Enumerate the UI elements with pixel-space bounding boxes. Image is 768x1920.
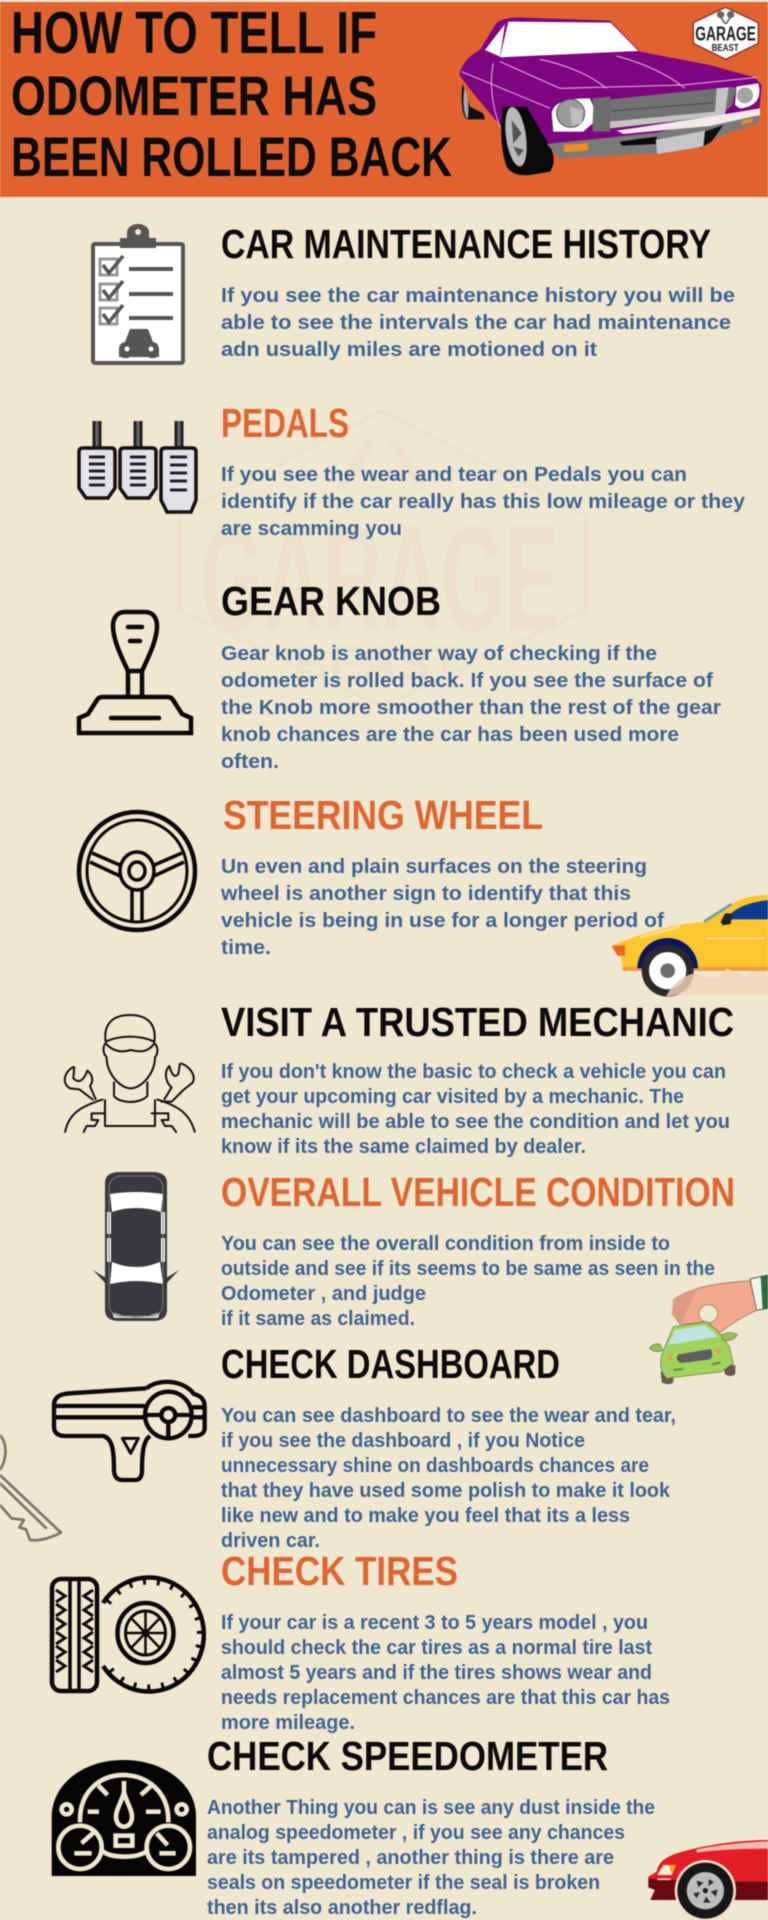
title: HOW TO TELL IF [11, 0, 377, 66]
text block: You can see the overall condition from inside to [221, 1233, 670, 1255]
text block [221, 1612, 670, 1734]
icon: hand holding green car [649, 1275, 768, 1384]
heading: CHECK DASHBOARD [221, 1341, 560, 1387]
text block: outside and see if its seems to be same as seen in the [221, 1258, 715, 1280]
text block: then its also another redflag. [207, 1897, 477, 1919]
text block: able to see the intervals the car had maintenance [221, 312, 731, 334]
icon: mechanic [65, 1015, 195, 1133]
text block: If you see the car maintenance history you will be [221, 285, 735, 307]
icon: car key [0, 1435, 61, 1540]
text block [221, 1233, 715, 1330]
text block: get your upcoming car visited by a mechanic. The [221, 1086, 684, 1108]
title: ODOMETER HAS [11, 64, 377, 127]
text block [221, 643, 721, 773]
text block: more mileage. [221, 1712, 355, 1734]
panel: car maintenance history [93, 221, 735, 363]
text block: Un even and plain surfaces on the steering [221, 856, 647, 878]
text block: mechanic will be able to see the condition and let you [221, 1111, 730, 1133]
text block: vehicle is being in use for a longer period of [221, 910, 664, 932]
text block: like new and to make you feel that its a less [221, 1505, 630, 1527]
text block: if you see the dashboard , if you Notice [221, 1430, 585, 1452]
text block: almost 5 years and if the tires shows wear and [221, 1662, 652, 1684]
text block: that they have used some polish to make it look [221, 1480, 671, 1502]
text block: driven car. [221, 1530, 320, 1552]
text block [221, 1405, 676, 1552]
text block [207, 1797, 655, 1919]
text block: know if its the same claimed by dealer. [221, 1136, 586, 1158]
panel: visit a trusted mechanic [65, 999, 734, 1158]
heading: GEAR KNOB [221, 578, 441, 624]
title: BEEN ROLLED BACK [11, 125, 452, 188]
text block: If your car is a recent 3 to 5 years model , you [221, 1612, 648, 1634]
text block: needs replacement chances are that this car has [221, 1687, 670, 1709]
text block: Gear knob is another way of checking if the [221, 643, 657, 665]
background watermark: Garage Beast logo [179, 411, 586, 706]
text block: seals on speedometer if the seal is broken [207, 1872, 600, 1894]
text block: unnecessary shine on dashboards chances are [221, 1455, 649, 1477]
panel: pedals [79, 400, 746, 540]
text block: wheel is another sign to identify that this [220, 883, 631, 905]
text block: You can see dashboard to see the wear and tear, [221, 1405, 676, 1427]
heading: PEDALS [221, 400, 349, 446]
text block: should check the car tires as a normal tire last [221, 1637, 652, 1659]
background watermark: Garage Beast logo: BEAST [294, 638, 460, 691]
text block: knob chances are the car has been used more [221, 724, 679, 746]
panel: check tires [52, 1548, 670, 1734]
text block: analog speedometer , if you see any chances [207, 1822, 625, 1844]
heading: STEERING WHEEL [223, 792, 543, 838]
panel: check speedometer [52, 1733, 768, 1920]
icon: purple car [459, 17, 762, 175]
text block: are scamming you [221, 518, 402, 540]
text block: Odometer , and judge [221, 1283, 426, 1305]
icon: gear shifter [79, 612, 191, 733]
text block: Another Thing you can is see any dust inside the [207, 1797, 655, 1819]
icon: red car [648, 1840, 768, 1920]
text block: If you don't know the basic to check a vehicle you can [221, 1061, 726, 1083]
header banner [0, 0, 768, 197]
logo: Garage Beast: BEAST [712, 43, 739, 54]
icon: clipboard [93, 224, 183, 363]
icon: dashboard [54, 1382, 205, 1480]
panel: check dashboard [0, 1341, 676, 1552]
text block: identify if the car really has this low mileage or they [221, 491, 746, 513]
text block: adn usually miles are motioned on it [221, 339, 597, 361]
text block: often. [221, 751, 279, 773]
icon: steering wheel [79, 812, 195, 930]
text block [221, 285, 735, 361]
text block: odometer is rolled back. If you see the surface of [221, 670, 713, 692]
heading: CHECK SPEEDOMETER [207, 1733, 608, 1779]
text block: time. [221, 937, 271, 959]
panel: gear knob [79, 578, 721, 773]
icon: pedals [79, 421, 196, 512]
text block: the Knob more smoother than the rest of the gear [221, 697, 721, 719]
panel: steering wheel [79, 792, 768, 997]
logo: Garage Beast [693, 7, 758, 59]
title [11, 0, 452, 188]
panel: overall vehicle condition [93, 1169, 768, 1384]
text block: are its tampered , another thing is there are [207, 1847, 614, 1869]
text block: If you see the wear and tear on Pedals you can [221, 464, 687, 486]
text block [221, 464, 746, 540]
icon: yellow car [612, 895, 768, 997]
text block [220, 856, 664, 959]
icon: speedometer [52, 1760, 196, 1876]
icon: tires [52, 1578, 204, 1691]
icon: car top view [93, 1172, 179, 1321]
heading: CHECK TIRES [221, 1548, 458, 1594]
text block: if it same as claimed. [221, 1308, 415, 1330]
text block [221, 1061, 730, 1158]
